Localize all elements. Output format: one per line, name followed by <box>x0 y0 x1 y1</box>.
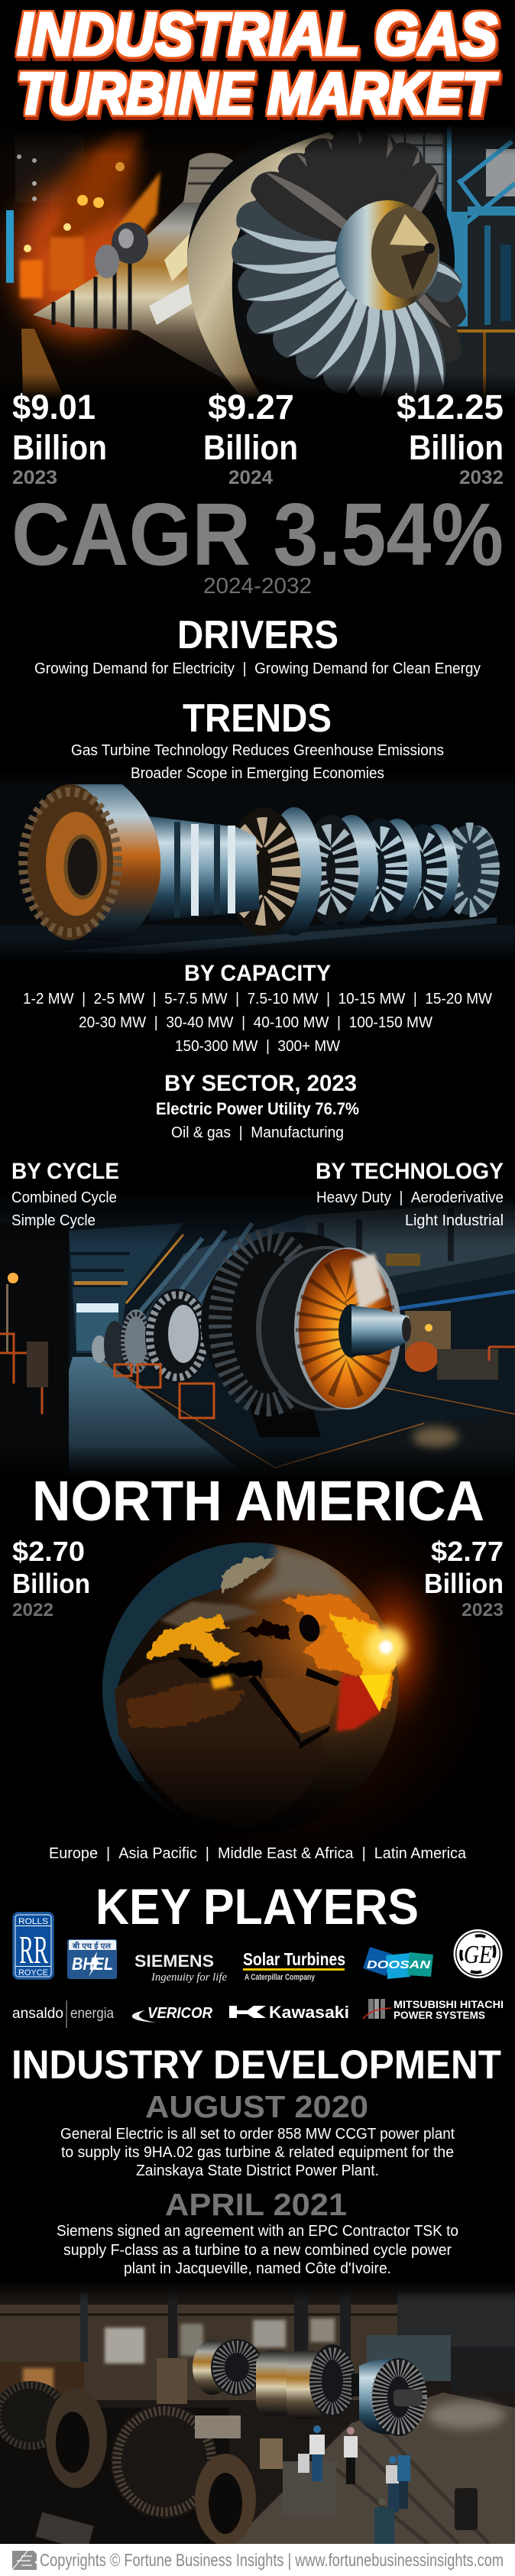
footer <box>0 2544 515 2576</box>
by capacity list <box>23 991 492 1055</box>
by sector others: Oil & gas | Manufacturing <box>171 1124 344 1141</box>
market value 2024: $9.27 <box>208 388 294 427</box>
image part: Asia glow <box>281 1594 396 1711</box>
image part: orange stands <box>115 1364 214 1418</box>
logo: Mitsubishi Hitachi Power Systems: POWER SYSTEMS <box>394 2009 485 2021</box>
by cycle list <box>11 1189 117 1229</box>
drivers heading: DRIVERS <box>177 613 338 657</box>
logo: Ansaldo Energia <box>12 2000 114 2028</box>
logo: Solar Turbines: A Caterpillar Company <box>245 1973 316 1982</box>
logo: Kawasaki <box>229 2003 349 2022</box>
by technology list <box>316 1189 504 1229</box>
market value 2024 <box>203 388 298 488</box>
logo: Rolls-Royce <box>13 1913 53 1979</box>
development text 2020 <box>60 2126 455 2179</box>
regional value 2023 <box>424 1536 504 1621</box>
logo: Doosan <box>363 1947 433 1979</box>
image: turbine hall <box>0 1192 515 1479</box>
regional value 2022: 2022 <box>12 1600 53 1621</box>
logo: GE <box>454 1929 503 1978</box>
logo: Rolls-Royce: ROYCE <box>18 1968 48 1977</box>
by cycle list: Simple Cycle <box>11 1212 96 1229</box>
key players heading: KEY PLAYERS <box>96 1878 419 1935</box>
image part: Arabia and India <box>264 1678 340 1734</box>
by cycle list: Combined Cycle <box>11 1189 117 1206</box>
regional value 2022: Billion <box>12 1568 90 1599</box>
logo: GE: GE <box>464 1941 492 1969</box>
market value 2032: 2032 <box>459 467 504 488</box>
logo: BHEL: BHEL <box>72 1954 113 1974</box>
logo: Kawasaki: Kawasaki <box>269 2003 349 2022</box>
image part: Scandinavia flecks <box>222 1556 275 1591</box>
market value 2032: Billion <box>409 428 504 467</box>
image part: rear discs <box>92 1289 209 1384</box>
image part: big gear disc <box>23 784 160 941</box>
image part: Africa <box>115 1659 322 1812</box>
trends text: Gas Turbine Technology Reduces Greenhouse Emissions <box>71 742 444 759</box>
image part: rotor <box>193 2339 426 2436</box>
by technology list: Heavy Duty | Aeroderivative <box>316 1189 504 1206</box>
by technology list: Light Industrial <box>405 1212 504 1229</box>
image part: right equipment <box>405 1311 515 1380</box>
image part: silver ring <box>187 147 455 381</box>
regional value 2022: $2.70 <box>12 1536 85 1567</box>
image part: dome <box>183 153 238 203</box>
logo: BHEL <box>67 1939 117 1979</box>
image part: central drum <box>149 816 260 921</box>
image part: first spoked disc <box>227 807 322 936</box>
image part: hub <box>335 200 439 310</box>
logo: Solar Turbines: Solar Turbines <box>243 1949 345 1969</box>
regional value 2022 <box>12 1536 90 1621</box>
image part: far discs <box>303 815 499 925</box>
market value 2023 <box>12 388 107 488</box>
by capacity list: 150-300 MW | 300+ MW <box>175 1038 340 1055</box>
logo: Solar Turbines <box>243 1949 345 1982</box>
regional value 2023: 2023 <box>462 1600 504 1621</box>
logo: Mitsubishi Hitachi Power Systems <box>363 1998 504 2021</box>
logo: Ansaldo Energia: ansaldo <box>12 2006 63 2022</box>
by capacity list: 1-2 MW | 2-5 MW | 5-7.5 MW | 7.5-10 MW | 10-15 MW | 15-20 MW <box>23 991 492 1007</box>
market value 2032 <box>397 388 504 488</box>
market value 2032: $12.25 <box>397 388 504 427</box>
title <box>17 0 499 127</box>
logo: Siemens: Ingenuity for life <box>151 1971 227 1984</box>
market value 2023: Billion <box>12 428 107 467</box>
market value 2024: Billion <box>203 428 298 467</box>
icon: Fortune Business Insights logo <box>12 2551 37 2570</box>
image part: rotor tail and casing <box>33 200 229 381</box>
image part: sun flare <box>366 1627 406 1667</box>
by capacity list: 20-30 MW | 30-40 MW | 40-100 MW | 100-150 MW <box>79 1014 432 1031</box>
image part: blue ocean <box>92 1536 279 1781</box>
image part: lower shadow <box>116 1749 381 1835</box>
image: turbine workshop <box>0 2279 515 2550</box>
by sector leader: Electric Power Utility 76.7% <box>156 1099 359 1118</box>
image part: fan blades <box>230 123 474 404</box>
trends heading: TRENDS <box>183 696 332 741</box>
north america heading: NORTH AMERICA <box>32 1469 484 1533</box>
logo: Doosan: DOOSAN <box>367 1958 431 1971</box>
by capacity heading: BY CAPACITY <box>184 961 331 986</box>
market value 2024: 2024 <box>228 467 273 488</box>
logo: Mitsubishi Hitachi Power Systems: MITSUBISHI HITACHI <box>394 1998 504 2010</box>
image part: nose cone <box>338 1304 411 1358</box>
logo: Rolls-Royce: RR <box>19 1929 48 1972</box>
development text 2021: Siemens signed an agreement with an EPC Contractor TSK to <box>57 2223 458 2240</box>
image: turbine rotor row <box>0 771 515 962</box>
development date April 2021: APRIL 2021 <box>165 2187 347 2222</box>
image part: Europe lights <box>145 1614 238 1665</box>
by sector heading: BY SECTOR, 2023 <box>164 1071 357 1096</box>
logo: Siemens: SIEMENS <box>134 1951 214 1971</box>
development text 2020: General Electric is all set to order 858 MW CCGT power plant <box>60 2126 455 2143</box>
image: turbine hero <box>0 122 515 404</box>
development text 2021: supply F-class as a turbine to a new combined cycle power <box>63 2242 452 2259</box>
by cycle heading: BY CYCLE <box>11 1159 119 1184</box>
development text 2020: to supply its 9HA.02 gas turbine & related equipment for the <box>61 2144 454 2161</box>
other regions: Europe | Asia Pacific | Middle East & Africa | Latin America <box>49 1845 467 1862</box>
logo: Siemens <box>134 1951 227 1984</box>
market value 2023: 2023 <box>12 467 57 488</box>
by technology heading: BY TECHNOLOGY <box>316 1159 504 1184</box>
logo: Rolls-Royce: ROLLS <box>18 1917 48 1926</box>
development text 2020: Zainskaya State District Power Plant. <box>136 2162 379 2179</box>
drivers text: Growing Demand for Electricity | Growing Demand for Clean Energy <box>34 660 481 677</box>
image part: big turbine disc <box>201 1232 401 1413</box>
image part: left machines <box>0 2381 336 2550</box>
trends text: Broader Scope in Emerging Economies <box>131 765 384 782</box>
regional value 2023: Billion <box>424 1568 504 1599</box>
CAGR period: 2024-2032 <box>203 574 312 599</box>
regional value 2023: $2.77 <box>431 1536 504 1567</box>
image part: workers <box>298 2425 410 2544</box>
image: globe <box>102 1517 460 1831</box>
logo: BHEL: बी एच ई एल <box>72 1941 112 1951</box>
logo: Ansaldo Energia: energia <box>70 2006 114 2022</box>
development date August 2020: AUGUST 2020 <box>145 2089 368 2124</box>
logo: Vericor: VERICOR <box>147 2005 213 2022</box>
development text 2021: plant in Jacqueville, named Côte d'Ivoire. <box>124 2260 391 2277</box>
market value 2023: $9.01 <box>12 388 96 427</box>
trends text <box>71 742 444 782</box>
development text 2021 <box>57 2223 458 2277</box>
